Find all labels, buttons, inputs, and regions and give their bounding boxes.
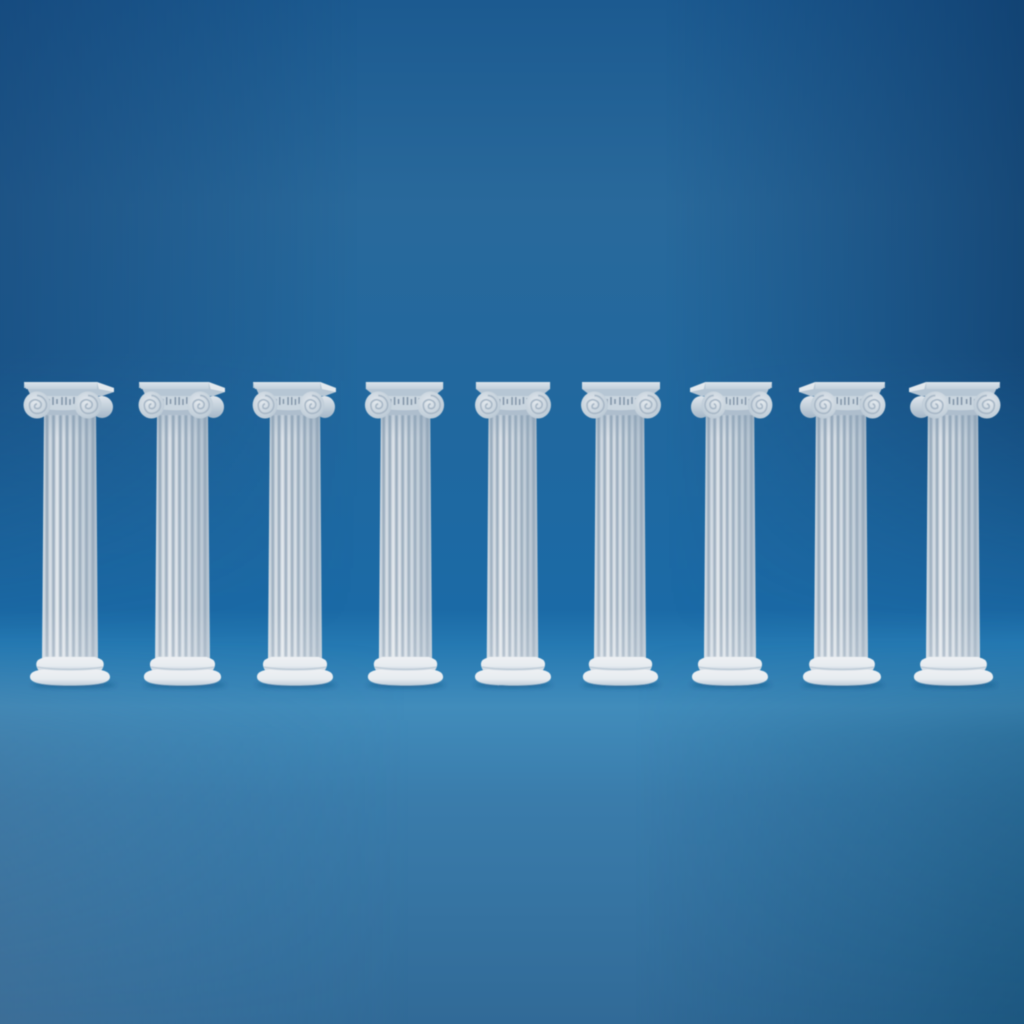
column 1 [24, 382, 116, 688]
column 6 [581, 382, 661, 688]
column 2 [139, 382, 226, 688]
column 8 [799, 382, 885, 688]
column 9 [909, 382, 1000, 688]
column 5 [474, 382, 552, 688]
column 7 [690, 382, 772, 688]
column 3 [253, 382, 336, 688]
column 4 [365, 382, 445, 688]
